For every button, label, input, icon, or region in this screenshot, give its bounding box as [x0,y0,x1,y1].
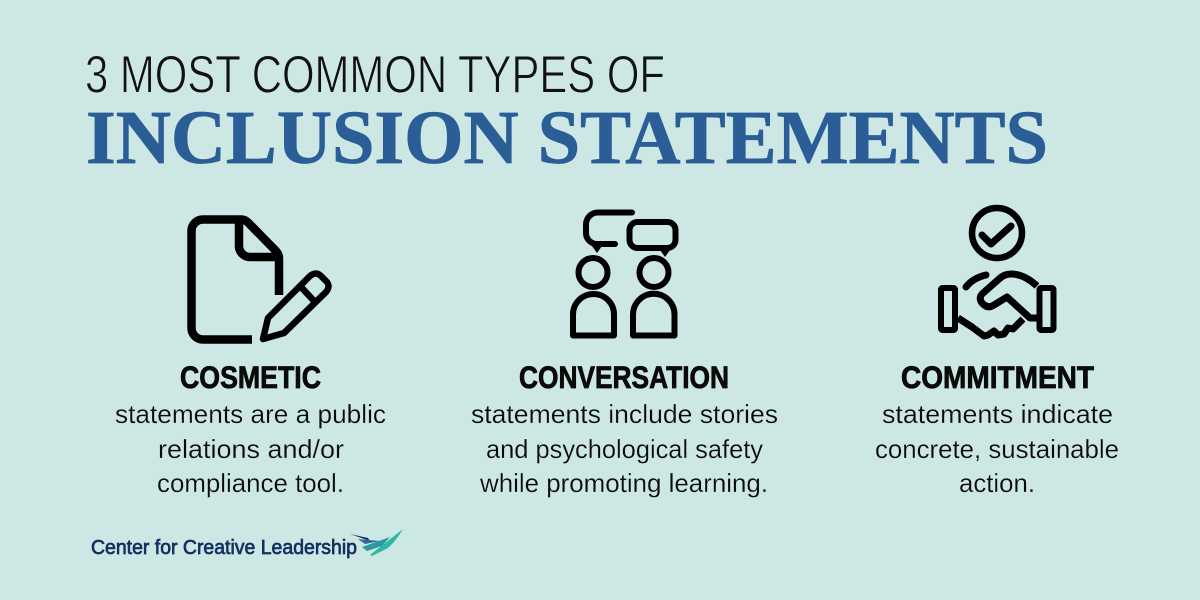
heading: commitment: COMMITMENT [901,359,1094,395]
heading: cosmetic: COSMETIC [180,359,321,395]
description: cosmetic: relations and/or [158,434,344,464]
description: commitment: concrete, sustainable [875,434,1119,464]
logo: Center for Creative Leadership [91,529,403,559]
title line 1: 3 MOST COMMON TYPES OF [85,46,665,104]
icon: two people with speech bubbles [573,212,676,336]
description: conversation: and psychological safety [486,434,763,464]
description: commitment [875,399,1119,498]
logo wordmark: Center for Creative Leadership [91,537,357,559]
icon: document and pencil [192,220,328,340]
panel: commitment [875,208,1119,498]
description: cosmetic [115,399,386,498]
description: cosmetic: compliance tool. [157,468,344,498]
title line 2: INCLUSION STATEMENTS [86,96,1048,180]
heading: conversation: CONVERSATION [519,359,729,395]
logo wing [350,529,403,556]
description: conversation: statements include stories [471,399,778,429]
description: cosmetic: statements are a public [115,399,386,429]
icon: handshake with check mark [941,208,1054,336]
description: conversation [471,399,778,498]
description: commitment: action. [959,468,1035,498]
title [85,46,1048,180]
panel: cosmetic [115,220,386,498]
panel: conversation [471,212,778,498]
description: commitment: statements indicate [882,399,1113,429]
description: conversation: while promoting learning. [479,468,768,498]
